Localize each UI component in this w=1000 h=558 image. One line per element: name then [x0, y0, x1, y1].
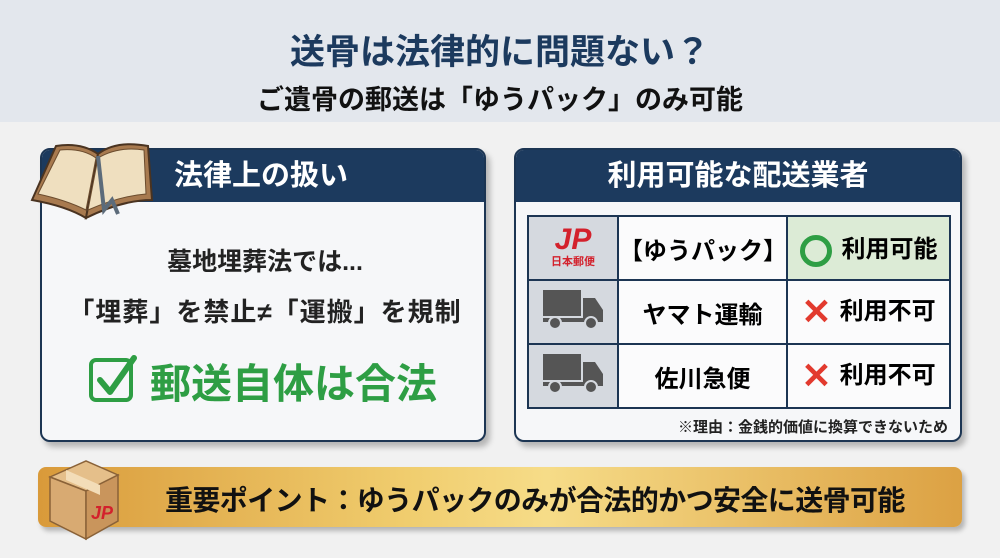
note: ※理由：金銭的価値に換算できないため [678, 419, 948, 436]
panel: carriers [514, 148, 962, 442]
carrier table: 佐川急便 [654, 366, 750, 392]
panel heading [516, 150, 960, 202]
panel heading [42, 150, 484, 202]
icon: checkbox [89, 355, 137, 402]
carrier table: ✕ 利用不可 [801, 355, 936, 396]
icon: parcel box: JP [91, 503, 114, 523]
carrier table: ヤマト運輸 [642, 302, 762, 328]
panel heading: 法律上の扱い [174, 160, 348, 192]
carrier table: 利用可能 [842, 236, 938, 263]
banner: key point [38, 467, 962, 527]
carrier table [527, 215, 951, 409]
text: regulation: 「埋葬」を禁止≠「運搬」を規制 [68, 297, 462, 327]
icon: parcel box [48, 460, 120, 540]
icon: open book [30, 143, 153, 220]
panel heading: 利用可能な配送業者 [607, 160, 868, 192]
carrier table: 【ゆうパック】 [619, 238, 787, 264]
title: 送骨は法律的に問題ない？ [290, 33, 710, 72]
carrier table: 日本郵便 [551, 252, 595, 268]
carrier table: ✕ 利用不可 [801, 291, 936, 332]
subtitle: ご遺骨の郵送は「ゆうパック」のみ可能 [257, 85, 743, 115]
banner text: 重要ポイント：ゆうパックのみが合法的かつ安全に送骨可能 [165, 485, 905, 516]
green conclusion: 郵送自体は合法 [150, 361, 437, 407]
header band [0, 0, 1000, 122]
text: law: 墓地埋葬法では... [167, 248, 363, 276]
carrier table: JP [555, 222, 592, 256]
panel: legal treatment [40, 148, 486, 442]
